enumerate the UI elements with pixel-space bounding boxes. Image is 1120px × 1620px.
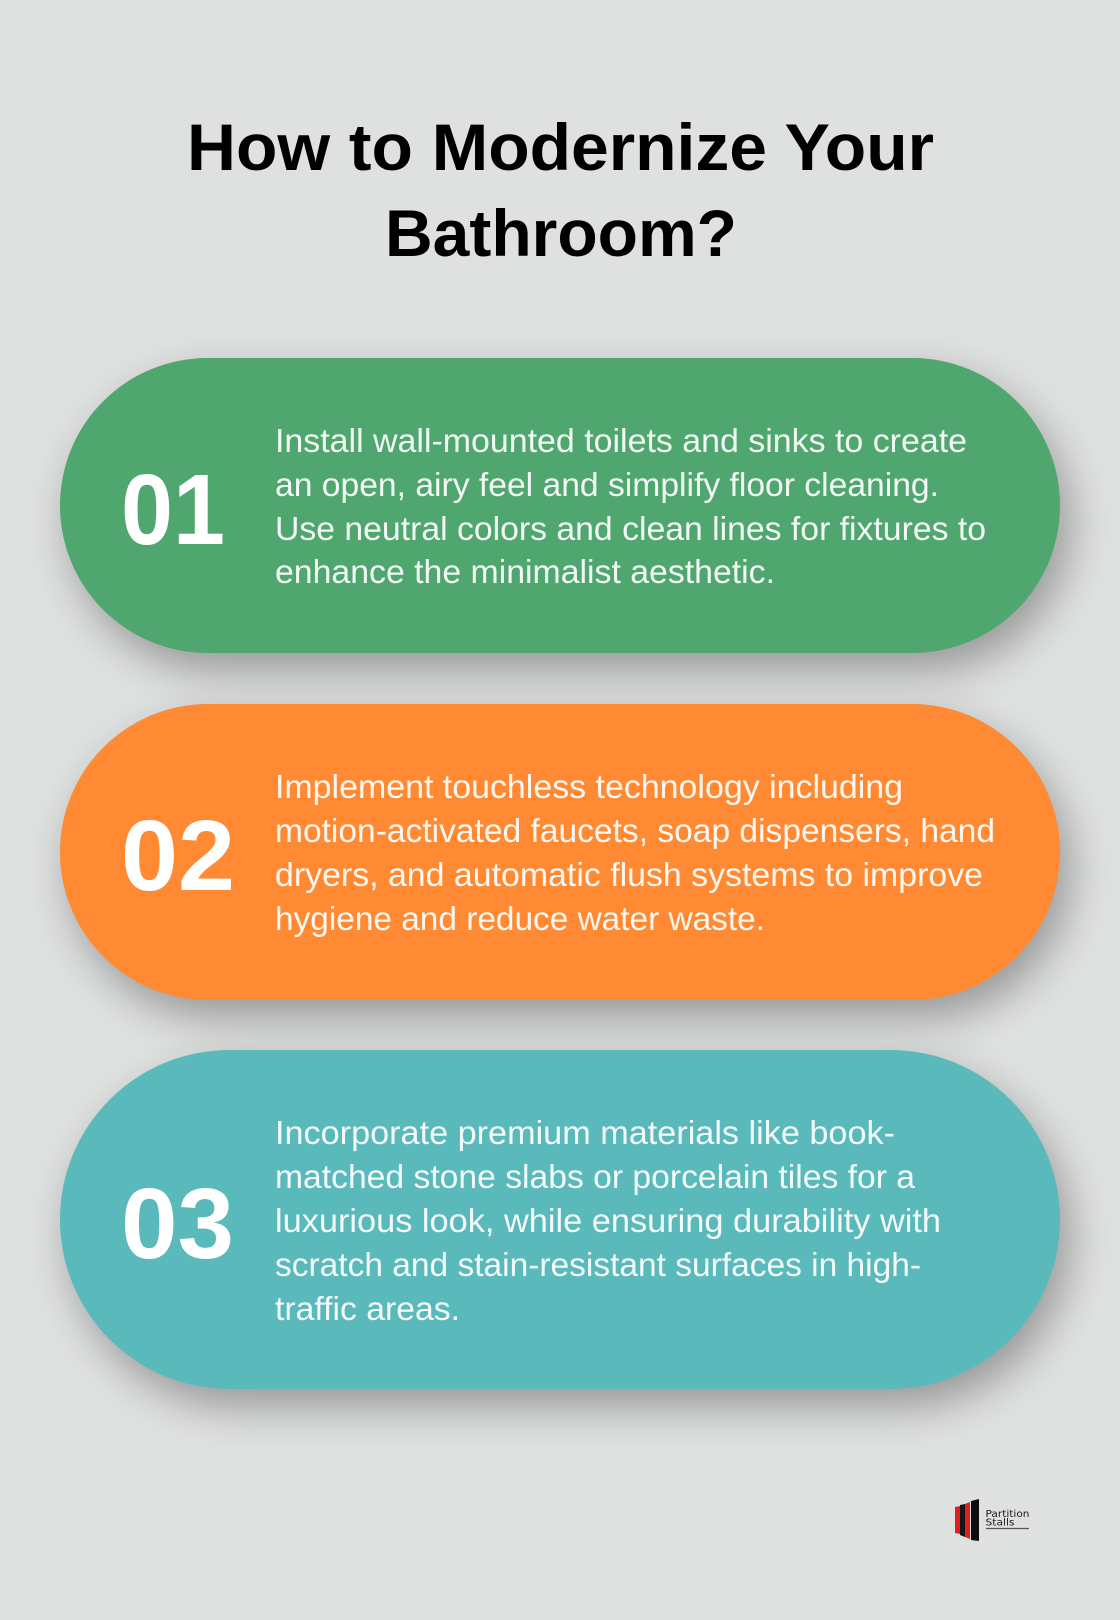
step 01 description (275, 422, 986, 590)
title (187, 110, 934, 270)
step 02 description: dryers, and automatic flush systems to improve (275, 856, 983, 893)
step number 03: 03 (121, 1168, 234, 1280)
step 02 description (275, 768, 995, 937)
step 01 description: Use neutral colors and clean lines for fixtures to (275, 510, 986, 547)
logo wordmark: Partition (986, 1509, 1030, 1520)
step 03 description: scratch and stain-resistant surfaces in high- (275, 1246, 921, 1283)
step 03 description: Incorporate premium materials like book- (275, 1114, 895, 1151)
title: How to Modernize Your (187, 110, 934, 184)
step 02 description: Implement touchless technology including (275, 768, 903, 805)
step 01 description: Install wall-mounted toilets and sinks to create (275, 422, 967, 459)
step 03 description: luxurious look, while ensuring durability with (275, 1202, 941, 1239)
step number 01: 01 (121, 454, 225, 566)
logo wordmark: Stalls (986, 1518, 1015, 1528)
panel: step 02 touchless technology (60, 704, 1060, 1000)
logo: Partition Stalls (955, 1499, 1030, 1541)
panel: step 03 premium materials (60, 1050, 1060, 1389)
step number 02: 02 (121, 800, 235, 912)
logo wordmark (986, 1509, 1030, 1530)
panel: step 01 wall-mounted fixtures (60, 358, 1060, 653)
step 01 description: an open, airy feel and simplify floor cleaning. (275, 466, 939, 503)
step 01 description: enhance the minimalist aesthetic. (275, 553, 775, 590)
step 03 description (275, 1114, 941, 1327)
step 03 description: matched stone slabs or porcelain tiles for a (275, 1158, 916, 1195)
title: Bathroom? (385, 196, 737, 270)
icon: partition bars (955, 1499, 979, 1541)
step 02 description: motion-activated faucets, soap dispensers, hand (275, 812, 995, 849)
step 02 description: hygiene and reduce water waste. (275, 900, 765, 937)
step 03 description: traffic areas. (275, 1290, 460, 1327)
